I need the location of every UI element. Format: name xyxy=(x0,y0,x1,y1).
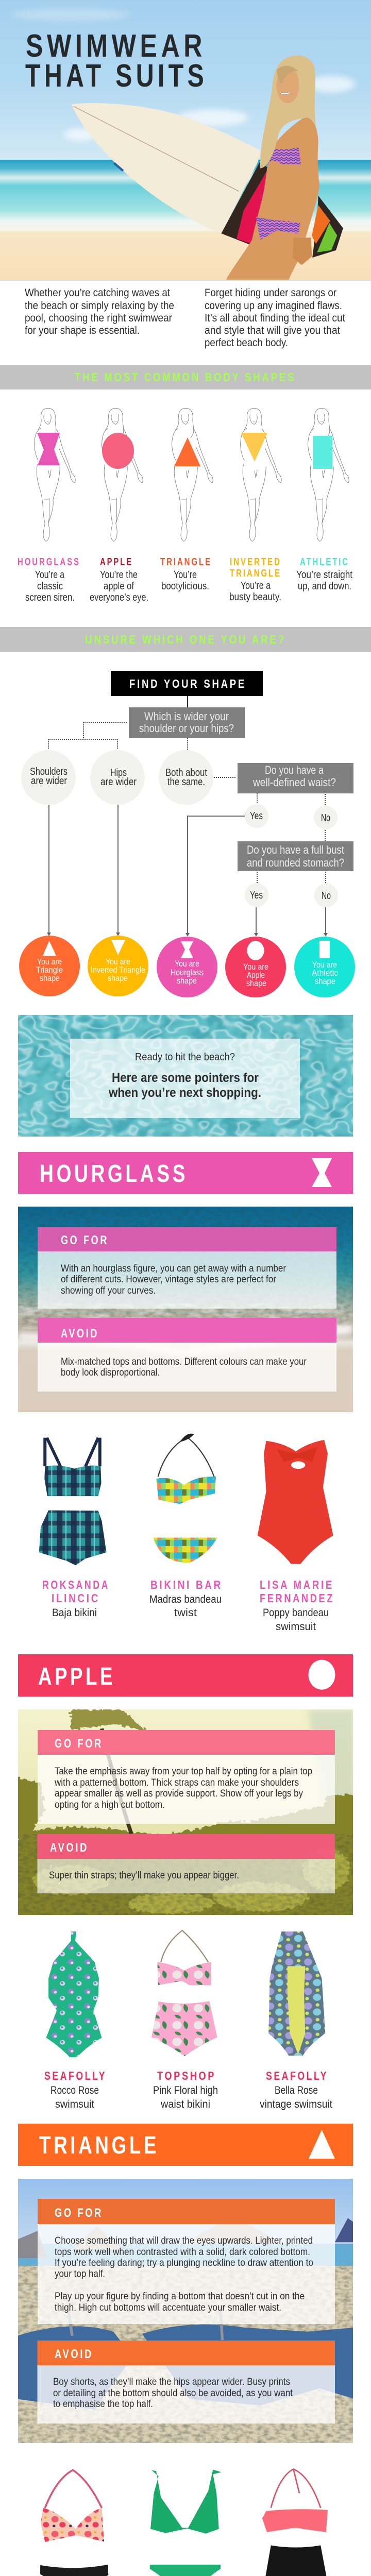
avoid text: Mix-matched tops and bottoms. Different colours can make your xyxy=(61,1357,307,1367)
body shape figures xyxy=(35,408,349,541)
panel: apple advice xyxy=(16,1709,357,1920)
answer: both the same xyxy=(159,750,213,805)
answer: shoulders wider: Shoulders xyxy=(30,766,68,777)
figure: inverted triangle xyxy=(241,408,281,541)
answer: shoulders wider xyxy=(21,750,76,805)
section header: triangle: TRIANGLE xyxy=(39,2131,159,2159)
result: inverted triangle: You are xyxy=(106,957,130,967)
result: triangle: You are xyxy=(37,957,62,967)
go for text: thigh. High cut bottoms will accentuate your smaller waist. xyxy=(55,2302,281,2313)
avoid header xyxy=(38,1318,336,1343)
result: apple: shape xyxy=(246,978,266,988)
banner: the most common body shapes: THE MOST COMMON BODY SHAPES xyxy=(75,370,296,384)
result: apple xyxy=(225,937,286,997)
flowchart: find your shape xyxy=(19,671,355,997)
go for text: showing off your curves. xyxy=(61,1285,156,1296)
question: well-defined waist: well-defined waist? xyxy=(252,776,336,789)
product: Lisa Marie Fernandez: Poppy bandeau xyxy=(263,1607,329,1619)
question: shoulders or hips xyxy=(129,707,245,738)
go for header: GO FOR xyxy=(55,1737,103,1751)
result: hourglass: shape xyxy=(177,976,197,986)
answer: no xyxy=(314,884,338,907)
question: full bust xyxy=(238,841,353,871)
product: Seafolly Rocco Rose: swimsuit xyxy=(55,2098,94,2110)
product: Topshop Pink Floral: waist bikini xyxy=(160,2098,210,2110)
title: SWIMWEAR xyxy=(26,28,206,64)
result: hourglass xyxy=(157,937,217,997)
product: Lisa Marie Fernandez: swimsuit xyxy=(276,1621,316,1633)
product: Lisa Marie Fernandez xyxy=(258,1440,334,1633)
avoid text xyxy=(37,2365,335,2424)
product: Seafolly Rocco Rose xyxy=(44,1931,107,2110)
product: Seafolly Bella Rose: SEAFOLLY xyxy=(266,2069,328,2082)
banner: unsure which one you are: UNSURE WHICH ONE YOU ARE? xyxy=(85,633,286,646)
section header: triangle xyxy=(18,2124,353,2166)
question: shoulders or hips: shoulder or your hips? xyxy=(139,722,234,735)
product: Bikini Bar xyxy=(149,1434,223,1619)
result: athletic: Athletic xyxy=(312,968,338,978)
shape caption: athletic: You’re straight xyxy=(296,569,352,581)
panel: ready to hit the beach: Here are some pointers for xyxy=(112,1071,259,1085)
heading box: FIND YOUR SHAPE xyxy=(129,677,246,690)
section header: apple: APPLE xyxy=(38,1663,115,1690)
result: inverted triangle xyxy=(88,936,148,996)
product: Seafolly Bella Rose: Bella Rose xyxy=(275,2084,318,2096)
avoid text: or detailing at the bottom should also be avoided, as you want xyxy=(53,2388,293,2399)
avoid text xyxy=(38,1343,336,1392)
answer: yes: Yes xyxy=(250,810,263,822)
answer: hips wider: are wider xyxy=(100,776,137,788)
panel: hourglass advice xyxy=(18,1207,353,1412)
product: Roksanda Ilincic: ROKSANDA xyxy=(42,1578,110,1591)
intro text column 2: perfect beach body. xyxy=(205,337,288,349)
go for text xyxy=(38,2224,335,2324)
avoid text xyxy=(37,1859,335,1893)
shape caption: apple: You’re the xyxy=(100,569,138,581)
avoid text: Super thin straps; they’ll make you appear bigger. xyxy=(49,1870,239,1881)
question: well-defined waist xyxy=(238,763,353,793)
overlay: inverted triangle shape xyxy=(241,433,267,462)
result: hourglass: You are xyxy=(175,959,199,969)
answer: no xyxy=(314,806,338,829)
avoid header xyxy=(37,2341,335,2365)
intro text column 1: pool, choosing the right swimwear xyxy=(25,312,172,324)
product: French Connection xyxy=(255,2469,338,2576)
avoid header xyxy=(37,1834,335,1859)
flow connectors xyxy=(47,696,328,937)
figure: athletic xyxy=(308,408,349,541)
product: Seafolly Bella Rose xyxy=(260,1931,332,2110)
shape caption: inverted triangle: busty beauty. xyxy=(229,591,281,603)
product: Lisa Marie Fernandez: LISA MARIE xyxy=(260,1578,334,1591)
figure: hourglass xyxy=(35,408,75,541)
shape caption: athletic xyxy=(296,556,352,592)
result: triangle: shape xyxy=(40,973,60,983)
panel: triangle advice xyxy=(16,2179,355,2443)
intro text column 2: covering up any imagined flaws. xyxy=(205,300,342,312)
answer: yes: Yes xyxy=(250,890,263,901)
product: Topshop Pink Floral xyxy=(151,1930,218,2110)
title: THAT SUITS xyxy=(25,58,208,94)
intro text column 2: Forget hiding under sarongs or xyxy=(205,287,336,299)
intro text column 2 xyxy=(205,287,345,349)
banner: unsure which one you are xyxy=(0,627,371,652)
shape caption: hourglass: classic xyxy=(37,581,63,592)
result: inverted triangle: shape xyxy=(108,973,128,983)
shape caption: hourglass: You’re a xyxy=(35,569,65,581)
product: Roksanda Ilincic: ILINCIC xyxy=(52,1591,100,1605)
panel: ready to hit the beach: when you’re next shopping. xyxy=(108,1086,261,1100)
heading box xyxy=(111,671,263,696)
overlay: apple shape xyxy=(102,433,134,469)
figure: triangle xyxy=(172,408,213,541)
shape caption: apple: apple of xyxy=(104,581,134,592)
answer: shoulders wider: are wider xyxy=(31,775,67,787)
question: full bust: and rounded stomach? xyxy=(247,856,344,869)
product: Bikini Bar: twist xyxy=(174,1607,197,1619)
go for text xyxy=(38,1755,335,1824)
woman xyxy=(226,56,319,280)
product: Roksanda Ilincic: Baja bikini xyxy=(52,1607,97,1619)
product: Topshop Peonie Floral xyxy=(38,2470,111,2576)
product: Seafolly Rocco Rose: Rocco Rose xyxy=(50,2084,99,2096)
overlay: hourglass shape xyxy=(37,433,60,465)
go for text xyxy=(38,1251,336,1309)
shape caption: inverted triangle: TRIANGLE xyxy=(230,568,281,579)
product: Roksanda Ilincic xyxy=(39,1438,110,1619)
overlay: triangle shape xyxy=(174,437,200,466)
go for text: Choose something that will draw the eyes upwards. Lighter, printed xyxy=(55,2235,313,2246)
go for header: GO FOR xyxy=(61,1233,109,1247)
shape caption: hourglass: screen siren. xyxy=(25,592,75,603)
avoid header: AVOID xyxy=(55,2347,93,2361)
icon: apple xyxy=(308,1660,335,1690)
shape caption: triangle: TRIANGLE xyxy=(160,556,212,568)
answer: hips wider: Hips xyxy=(110,767,127,778)
intro text column 1: the beach or simply relaxing by the xyxy=(25,300,174,312)
answer: both the same: Both about xyxy=(165,767,207,778)
question: shoulders or hips: Which is wider your xyxy=(144,710,229,723)
question: full bust: Do you have a full bust xyxy=(247,843,344,856)
banner: the most common body shapes xyxy=(0,365,371,389)
shape caption: inverted triangle: INVERTED xyxy=(230,556,281,568)
result: hourglass: Hourglass xyxy=(171,968,204,977)
answer: hips wider xyxy=(90,750,145,805)
result: athletic: You are xyxy=(312,960,337,970)
product: Lisa Marie Fernandez: FERNANDEZ xyxy=(260,1591,334,1605)
question: well-defined waist: Do you have a xyxy=(265,764,324,776)
shape caption: apple xyxy=(90,556,148,603)
answer: yes xyxy=(245,804,268,828)
intro text column 1 xyxy=(25,287,174,336)
go for text: your top half. xyxy=(55,2269,105,2279)
shape caption: athletic: up, and down. xyxy=(298,581,351,592)
shape caption: triangle: You’re xyxy=(174,569,197,581)
intro text column 2: It’s all about finding the ideal cut xyxy=(205,312,345,324)
product: Topshop Pink Floral: TOPSHOP xyxy=(157,2069,216,2082)
hero photo: surfer on beach xyxy=(0,0,371,281)
shape caption: triangle xyxy=(160,556,212,592)
go for text: with a patterned bottom. Thick straps can make your shoulders xyxy=(54,1777,299,1788)
go for header xyxy=(38,2199,335,2224)
overlay: athletic shape xyxy=(313,436,332,469)
go for header xyxy=(38,1227,336,1251)
answer: both the same: the same. xyxy=(167,776,205,788)
avoid text: to emphasise the top half. xyxy=(53,2399,153,2410)
result: athletic: shape xyxy=(315,976,335,986)
shape caption: apple: APPLE xyxy=(100,556,133,568)
shape caption: inverted triangle xyxy=(229,556,281,603)
icon: triangle xyxy=(309,2130,335,2159)
go for text: of different cuts. However, vintage styles are perfect for xyxy=(61,1274,277,1285)
avoid text: body look disproportional. xyxy=(61,1367,160,1378)
go for text: Take the emphasis away from your top half by opting for a plain top xyxy=(55,1766,312,1777)
go for text: If you’re feeling daring; try a plunging neckline to draw attention to xyxy=(55,2258,313,2268)
avoid header: AVOID xyxy=(50,1841,89,1855)
answer: yes xyxy=(245,883,268,907)
shape caption: apple: everyone’s eye. xyxy=(90,592,148,603)
product: Bikini Bar: Madras bandeau xyxy=(149,1594,222,1605)
go for text: appear smaller as well as provide support. Show off your legs by xyxy=(55,1788,303,1799)
section header: hourglass xyxy=(18,1152,353,1194)
intro text column 2: and style that will give you that xyxy=(205,325,340,336)
product: Bikini Bar: BIKINI BAR xyxy=(150,1578,223,1591)
result: triangle: Triangle xyxy=(36,965,63,975)
result: inverted triangle: Inverted Triangle xyxy=(91,965,145,975)
result: triangle xyxy=(19,936,80,996)
intro text column 1: for your shape is essential. xyxy=(25,325,140,336)
panel: ready to hit the beach xyxy=(18,1015,353,1137)
product: Seafolly Bella Rose: vintage swimsuit xyxy=(260,2098,332,2110)
result: apple: You are xyxy=(243,962,268,972)
intro text column 1: Whether you’re catching waves at xyxy=(25,287,170,299)
shape caption: hourglass: HOURGLASS xyxy=(18,556,80,568)
icon: hourglass xyxy=(312,1158,332,1187)
surfboard xyxy=(72,103,343,258)
section header: apple xyxy=(18,1654,353,1697)
result: athletic xyxy=(294,937,355,997)
go for text: tops work well when contrasted with a solid, dark colored bottom. xyxy=(55,2247,310,2258)
go for text: opting for a high cut bottom. xyxy=(55,1800,165,1810)
shape caption: hourglass xyxy=(18,556,80,603)
answer: no: No xyxy=(322,890,331,902)
go for header xyxy=(38,1730,335,1755)
section header: hourglass: HOURGLASS xyxy=(40,1160,188,1188)
product: Violet Lake xyxy=(145,2469,227,2576)
go for text: With an hourglass figure, you can get away with a number xyxy=(61,1263,286,1274)
product: Seafolly Rocco Rose: SEAFOLLY xyxy=(44,2069,107,2082)
shape caption: inverted triangle: You’re a xyxy=(241,580,271,591)
figure: apple xyxy=(102,408,143,541)
product: Topshop Pink Floral: Pink Floral high xyxy=(153,2084,218,2096)
shape caption: athletic: ATHLETIC xyxy=(300,556,349,568)
answer: no: No xyxy=(321,812,330,824)
avoid text: Boy shorts, as they’ll make the hips appear wider. Busy prints xyxy=(53,2377,290,2387)
result: apple: Apple xyxy=(247,970,265,980)
panel: ready to hit the beach: Ready to hit the beach? xyxy=(135,1052,235,1063)
shape caption: triangle: bootylicious. xyxy=(161,581,209,592)
avoid header: AVOID xyxy=(61,1327,99,1341)
go for header: GO FOR xyxy=(55,2206,103,2220)
title xyxy=(25,28,208,94)
go for text: Play up your figure by finding a bottom that doesn’t cut in on the xyxy=(55,2291,305,2302)
